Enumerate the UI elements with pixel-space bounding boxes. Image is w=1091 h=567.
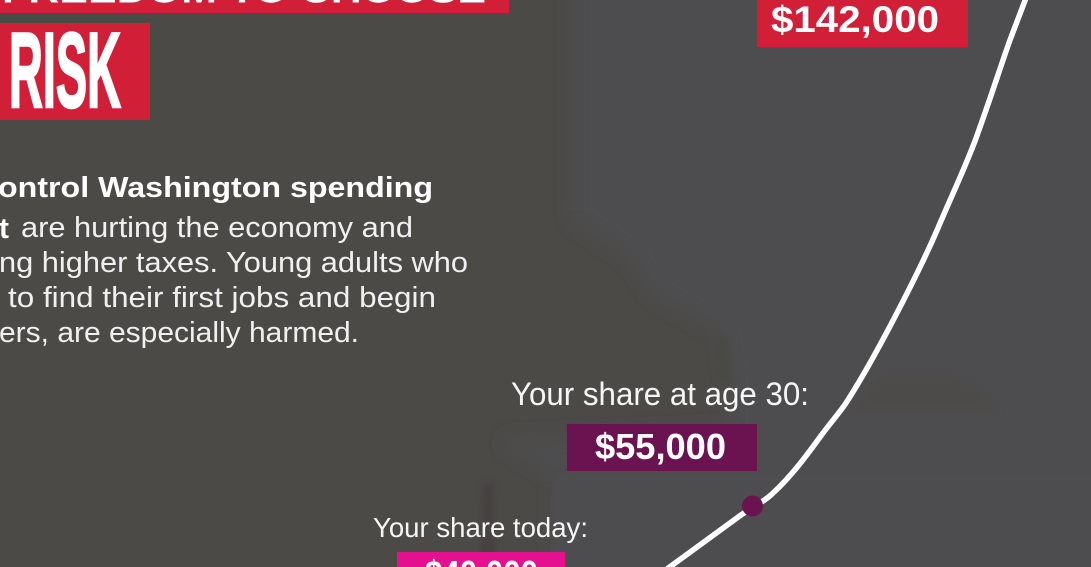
value box: top share: $142,000 — [771, 0, 939, 40]
body text block — [0, 172, 468, 349]
body text block: are hurting the economy and — [21, 212, 413, 244]
growth curve with age 30 marker — [667, 0, 1026, 567]
background photo: muted piggy bank on books — [485, 0, 1091, 552]
heading: risk — [0, 10, 150, 130]
body text block: ers, are especially harmed. — [0, 317, 359, 349]
label: share at age 30: $55,000 — [595, 426, 726, 467]
body text block: ontrol Washington spending — [0, 172, 433, 204]
label: share at age 30 — [511, 376, 809, 471]
label: share today — [374, 517, 586, 567]
body text block: ng higher taxes. Young adults who — [0, 247, 468, 279]
heading: freedom to choose — [0, 0, 509, 13]
heading: risk: RISK — [9, 10, 121, 130]
value box: top share — [757, 0, 968, 47]
label: share today: Your share today: — [373, 512, 588, 543]
label: share at age 30: Your share at age 30: — [511, 376, 809, 412]
body text block: to find their first jobs and begin — [8, 282, 436, 314]
